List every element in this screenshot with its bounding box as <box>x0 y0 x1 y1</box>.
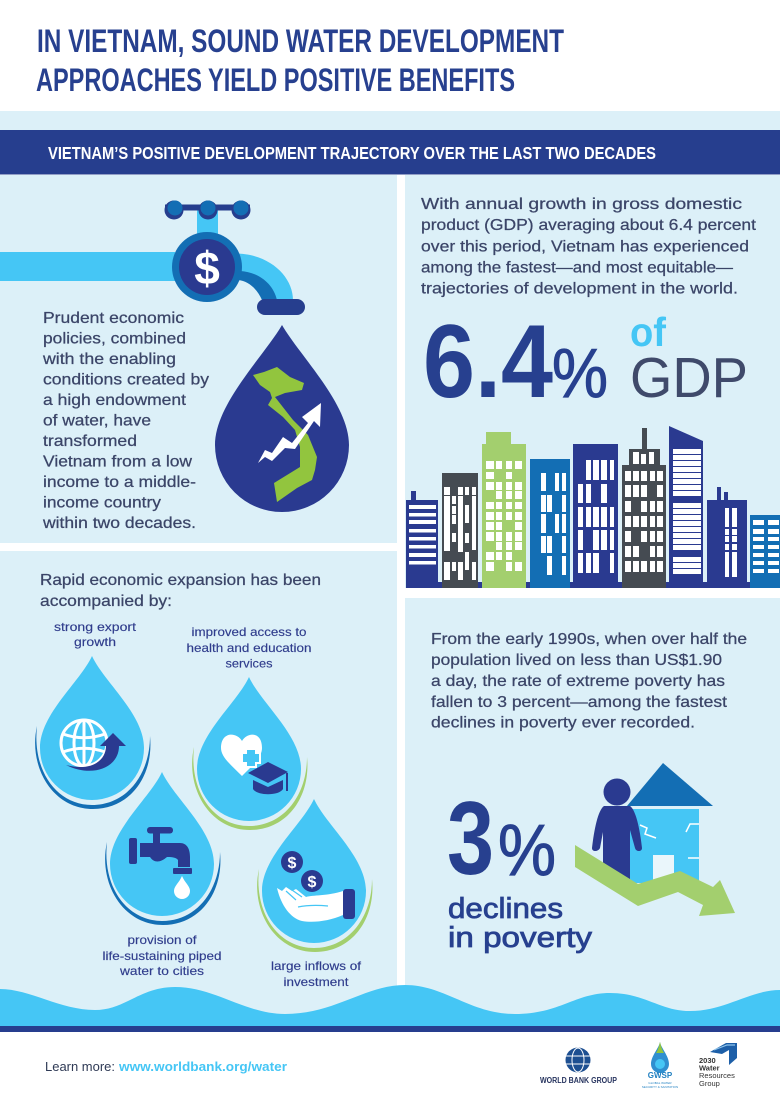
label: investment: large inflows of <box>271 959 362 973</box>
text block: policies: policies, combined <box>43 330 186 348</box>
icon: faucet: $ <box>194 242 220 294</box>
icon: house, person and falling arrow <box>575 763 735 916</box>
heading band: VIETNAM’S POSITIVE DEVELOPMENT TRAJECTORY OVER THE LAST TWO DECADES <box>48 143 656 163</box>
icon: investment drop <box>257 799 372 952</box>
panel: accompanying benefits <box>0 551 397 1026</box>
building 2 <box>442 473 478 588</box>
panel: GDP <box>405 175 780 588</box>
label: health and education: improved access to <box>192 625 307 639</box>
stat: 6.4% of GDP: of <box>630 309 666 355</box>
label: investment: investment <box>284 975 349 989</box>
building 9 <box>750 515 780 588</box>
logo: 2030 Water Resources Group <box>699 1043 737 1088</box>
text block: GDP growth: among the fastest—and most equitable— <box>421 260 733 276</box>
logo: World Bank Group: WORLD BANK GROUP <box>540 1076 618 1085</box>
building 6 <box>622 428 666 588</box>
building 5 <box>573 444 618 588</box>
text block: policies: a high endowment <box>43 392 187 409</box>
text block: policies: transformed <box>43 433 137 450</box>
label: export growth: strong export <box>54 620 137 634</box>
text block: GDP growth: With annual growth in gross domestic <box>421 196 742 213</box>
text block: rapid expansion <box>40 572 321 610</box>
logo: 2030 Water Resources Group: Resources <box>699 1071 735 1080</box>
text block: rapid expansion: accompanied by: <box>40 593 172 610</box>
footer: learn more <box>45 1059 287 1074</box>
stat: 6.4% of GDP: GDP <box>630 346 748 410</box>
logo: GWSP: GLOBAL WATER <box>648 1081 672 1085</box>
stat: 3% declines in poverty <box>447 781 593 954</box>
icon: health and education drop <box>192 677 307 830</box>
stat: 3% declines in poverty: declines <box>448 893 563 925</box>
text block: policies: within two decades. <box>42 515 196 532</box>
text block: poverty decline: fallen to 3 percent—among the fastest <box>431 694 728 711</box>
text block: policies: Vietnam from a low <box>43 454 192 470</box>
logo: 2030 Water Resources Group: Water <box>699 1064 720 1072</box>
text block: policies: income to a middle- <box>43 474 196 491</box>
building 4 <box>530 459 570 588</box>
text block: poverty decline: From the early 1990s, when over half the <box>431 631 747 648</box>
logo: GWSP: GWSP <box>648 1071 673 1080</box>
logo: 2030 Water Resources Group: 2030 <box>699 1056 716 1065</box>
text block: policies: of water, have <box>43 412 151 430</box>
label: piped water: water to cities <box>119 964 204 978</box>
label: health and education <box>186 625 312 670</box>
icon: export drop <box>35 656 150 809</box>
label: health and education: services <box>226 656 272 670</box>
stat: 6.4% of GDP <box>423 304 748 420</box>
text block: GDP growth: over this period, Vietnam has experienced <box>421 238 749 256</box>
text block: policies: conditions created by <box>43 372 209 388</box>
text block: poverty decline: population lived on less than US$1.90 <box>431 652 722 669</box>
stat: 6.4% of GDP: % <box>552 334 608 412</box>
icon: water drop with Vietnam map <box>215 325 349 512</box>
building 1 <box>406 491 438 588</box>
label: export growth: growth <box>74 635 116 649</box>
label: investment <box>271 959 362 989</box>
text block: poverty decline: a day, the rate of extreme poverty has <box>431 673 725 690</box>
footer: learn more: Learn more: <box>45 1059 115 1074</box>
panel: poverty <box>405 598 780 1026</box>
icon: investment drop: $ <box>308 874 317 891</box>
stat: 3% declines in poverty: in poverty <box>448 922 593 954</box>
footer: learn more: www.worldbank.org/water <box>118 1059 287 1074</box>
text block: rapid expansion: Rapid economic expansion has been <box>40 572 321 589</box>
label: health and education: health and education <box>186 641 312 655</box>
page background strip <box>0 111 780 130</box>
icon: piped water drop <box>105 772 220 925</box>
text block: GDP growth <box>421 196 757 298</box>
title: APPROACHES YIELD POSITIVE BENEFITS <box>36 62 515 98</box>
text block: policies: with the enabling <box>42 351 176 368</box>
stat: 3% declines in poverty: % <box>498 811 556 891</box>
logo: GWSP: SECURITY & SANITATION <box>642 1085 678 1089</box>
building 7 <box>669 426 703 582</box>
logo: 2030 Water Resources Group: Group <box>699 1079 720 1088</box>
logo: World Bank Group <box>540 1048 618 1085</box>
title: IN VIETNAM, SOUND WATER DEVELOPMENT <box>37 23 564 59</box>
title <box>36 23 564 98</box>
illustration: city skyline <box>406 426 780 588</box>
icon: investment drop: $ <box>288 855 297 872</box>
heading band <box>0 130 780 174</box>
label: piped water <box>102 933 222 978</box>
text block: policies <box>42 310 209 532</box>
logo: GWSP <box>642 1042 678 1089</box>
text block: GDP growth: trajectories of development in the world. <box>421 280 738 298</box>
text block: poverty decline <box>431 631 747 732</box>
icon: faucet <box>0 200 305 315</box>
wave <box>0 985 780 1032</box>
text block: policies: Prudent economic <box>43 310 184 327</box>
panel: economic policies <box>0 175 397 543</box>
label: piped water: life-sustaining piped <box>102 949 222 963</box>
text block: poverty decline: declines in poverty ever recorded. <box>431 714 695 732</box>
text block: policies: income country <box>43 494 161 512</box>
building 3 <box>482 432 526 588</box>
stat: 6.4% of GDP: 6.4 <box>423 304 553 420</box>
label: piped water: provision of <box>128 933 197 947</box>
label: export growth <box>54 620 137 649</box>
text block: GDP growth: product (GDP) averaging about 6.4 percent <box>421 217 757 234</box>
building 8 <box>707 487 747 588</box>
stat: 3% declines in poverty: 3 <box>447 781 494 897</box>
